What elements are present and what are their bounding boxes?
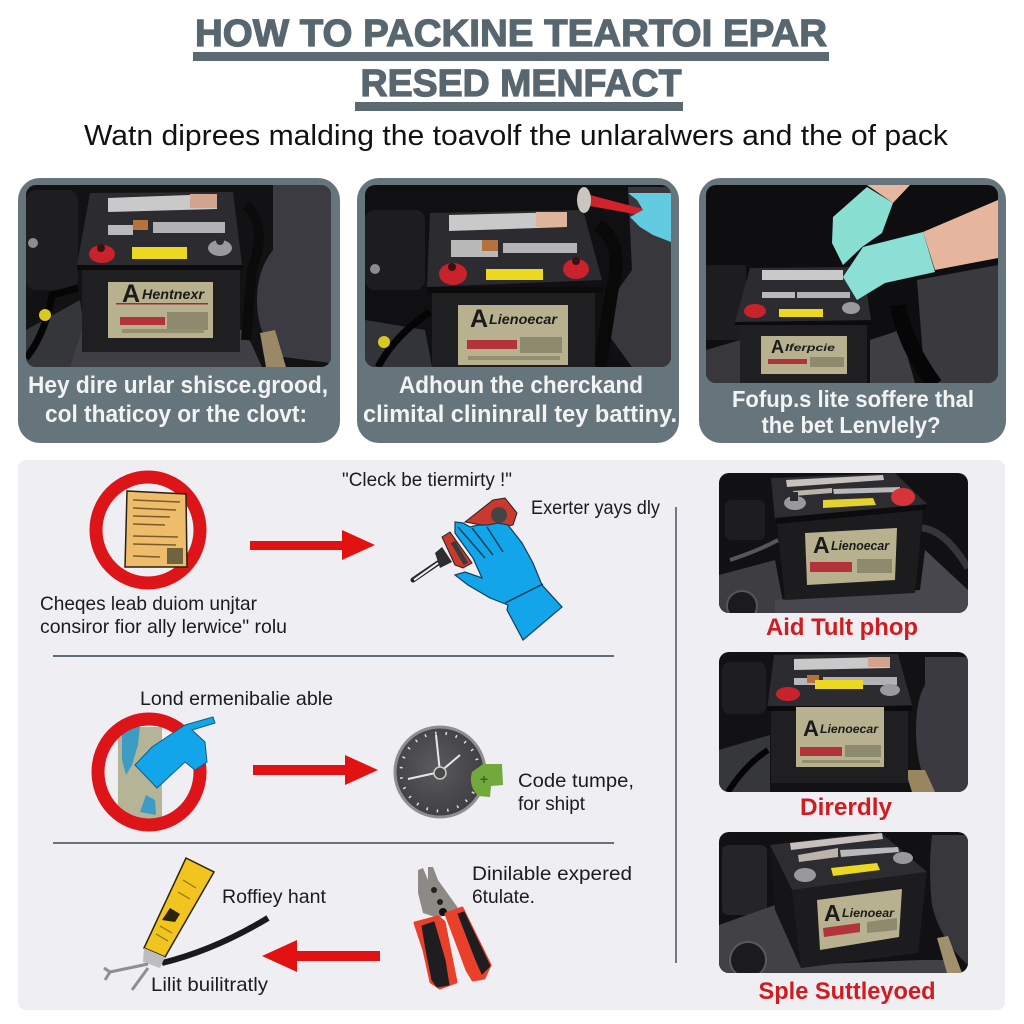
- caption: [732, 386, 974, 438]
- photo: battery in engine bay: Hentnexr: [142, 286, 206, 302]
- photo: battery with gloved hand and tool: [365, 185, 671, 373]
- text: quote: "Cleck be tiermirty !": [342, 469, 512, 491]
- text: dinilable: [472, 863, 632, 908]
- icon: pliers: [415, 867, 490, 988]
- caption: climital clininrall tey battiny.: [363, 401, 677, 428]
- photo: battery with gloved hand and tool: Lienoecar: [489, 311, 559, 327]
- photo: battery B: A: [803, 716, 819, 741]
- photo: battery A: A: [813, 532, 830, 558]
- label: red caption A: Aid Tult phop: [766, 614, 918, 641]
- icon: glove over sheet in red circle: [98, 717, 215, 825]
- text: code: for shipt: [518, 793, 586, 815]
- subtitle: Watn diprees malding the toavolf the unlaralwers and the of pack: [84, 120, 949, 152]
- icon: yellow packet and cable: [104, 858, 268, 990]
- label: red caption C: Sple Suttleyoed: [758, 978, 936, 1005]
- caption: [363, 372, 677, 428]
- photo: gloved hands on battery: Iferpcie: [785, 343, 836, 354]
- arrow: [253, 755, 378, 785]
- photo: battery in engine bay: [26, 185, 331, 367]
- text: check note: Cheqes leab duiom unjtar: [40, 593, 257, 615]
- title: [193, 13, 829, 111]
- text: exerter: Exerter yays dly: [531, 497, 660, 519]
- photo: battery with gloved hand and tool: A: [470, 305, 488, 333]
- photo: battery C: Lienoear: [842, 906, 895, 920]
- photo: battery A: Lienoecar: [831, 538, 890, 553]
- panel: step 1: [18, 178, 340, 443]
- caption: Fofup.s lite soffere thal: [732, 386, 974, 412]
- photo: battery A: [719, 473, 968, 621]
- photo: gloved hands on battery: A: [771, 337, 784, 357]
- panel: lower instructions: [18, 460, 1005, 1010]
- photo: battery C: A: [824, 900, 841, 926]
- icon: gloved hand with tool: [413, 498, 562, 640]
- photo: battery B: Lienoecar: [820, 722, 879, 736]
- caption: Adhoun the cherckand: [399, 372, 643, 399]
- arrow: [250, 530, 375, 560]
- title: HOW TO PACKINE TEARTOI EPAR: [195, 13, 827, 55]
- text: code: Code tumpe,: [518, 770, 634, 792]
- text: lond: Lond ermenibalie able: [140, 688, 333, 710]
- photo: battery in engine bay: A: [122, 280, 140, 308]
- photo: gloved hands on battery: [706, 185, 998, 385]
- text: roffiey: Roffiey hant: [222, 886, 327, 908]
- caption: Hey dire urlar shisce.grood,: [28, 372, 328, 399]
- photo: battery C: [719, 832, 968, 978]
- panel: step 3: [699, 178, 1006, 443]
- panel: step 2: [357, 178, 679, 443]
- label: red caption B: Direrdly: [800, 794, 893, 821]
- text: check note: consiror fior ally lerwice" rolu: [40, 616, 287, 638]
- caption: [28, 372, 328, 428]
- text: dinilable: Dinilable expered: [472, 863, 632, 885]
- text: check note: [40, 593, 287, 638]
- icon: clock: [395, 727, 503, 817]
- icon: clock: +: [480, 771, 488, 787]
- text: lilit: Lilit builitratly: [151, 974, 268, 996]
- text: dinilable: 6tulate.: [472, 886, 535, 908]
- title: RESED MENFACT: [360, 63, 682, 105]
- arrow: [262, 940, 380, 972]
- caption: col thaticoy or the clovt:: [45, 401, 307, 428]
- icon: document in red circle: [96, 477, 200, 583]
- text: code: [518, 770, 634, 815]
- caption: the bet Lenvlely?: [762, 412, 940, 438]
- photo: battery B: [719, 652, 968, 792]
